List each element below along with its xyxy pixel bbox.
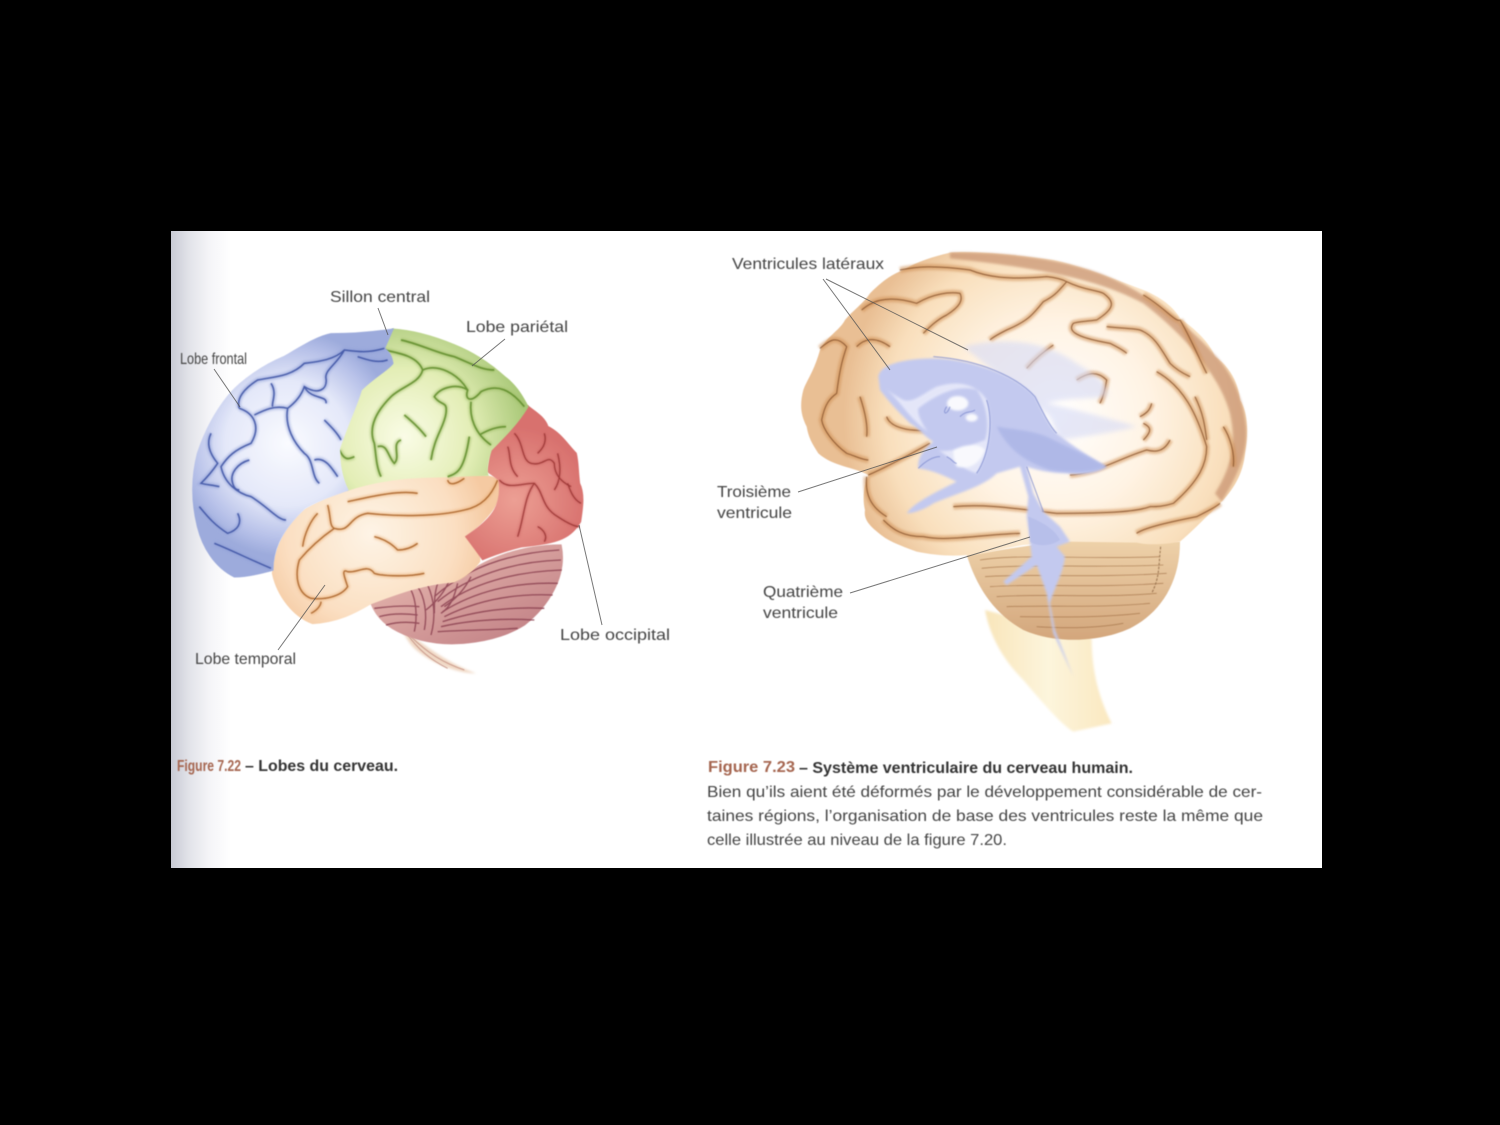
label: Lobe temporal: Lobe temporal xyxy=(195,651,296,668)
brainstem xyxy=(985,610,1112,732)
label: Lobe pariétal: Lobe pariétal xyxy=(466,319,568,336)
label: Lobe occipital: Lobe occipital xyxy=(560,627,670,644)
caption: figure 7.22: Figure 7.22 xyxy=(177,758,241,775)
temporal lobe xyxy=(273,475,501,623)
caption: figure 7.22: – Lobes du cerveau. xyxy=(245,758,398,775)
figure 7.22: brain lobes illustration xyxy=(193,329,583,673)
book gutter shadow xyxy=(171,231,231,868)
figure 7.23: ventricular system illustration xyxy=(801,252,1247,732)
label: Troisième ventricule: Troisième xyxy=(717,484,791,501)
label: Ventricules latéraux: Ventricules latéraux xyxy=(732,256,884,273)
label: Sillon central: Sillon central xyxy=(330,289,430,306)
caption: figure 7.22 xyxy=(177,758,398,775)
page background xyxy=(171,231,1322,868)
label: Troisième ventricule xyxy=(717,484,792,522)
caption: figure 7.23 xyxy=(707,759,1263,849)
outer rim band xyxy=(950,253,1246,502)
label: Troisième ventricule: ventricule xyxy=(717,505,792,522)
occipital lobe xyxy=(466,406,583,559)
ventricles xyxy=(878,341,1137,677)
leader lines xyxy=(214,279,1030,650)
cerebellum xyxy=(967,540,1180,640)
caption: figure 7.23: Bien qu’ils aient été déformés par le développement considérable de cer- xyxy=(707,784,1262,801)
caption: figure 7.23: Figure 7.23 xyxy=(708,759,795,776)
label: Quatrième ventricule: Quatrième xyxy=(763,584,843,601)
caption: figure 7.23: taines régions, l’organisation de base des ventricules reste la même que xyxy=(707,808,1263,825)
parietal lobe xyxy=(339,329,528,490)
cerebrum xyxy=(801,252,1247,556)
label: Quatrième ventricule xyxy=(763,584,843,622)
frontal lobe xyxy=(193,329,393,577)
caption: figure 7.23: celle illustrée au niveau de la figure 7.20. xyxy=(707,832,1007,849)
cerebellum xyxy=(371,545,562,644)
label: Lobe frontal: Lobe frontal xyxy=(180,351,247,368)
label: Quatrième ventricule: ventricule xyxy=(763,605,838,622)
caption: figure 7.23: – Système ventriculaire du cerveau humain. xyxy=(799,760,1133,777)
brainstem xyxy=(401,627,476,673)
